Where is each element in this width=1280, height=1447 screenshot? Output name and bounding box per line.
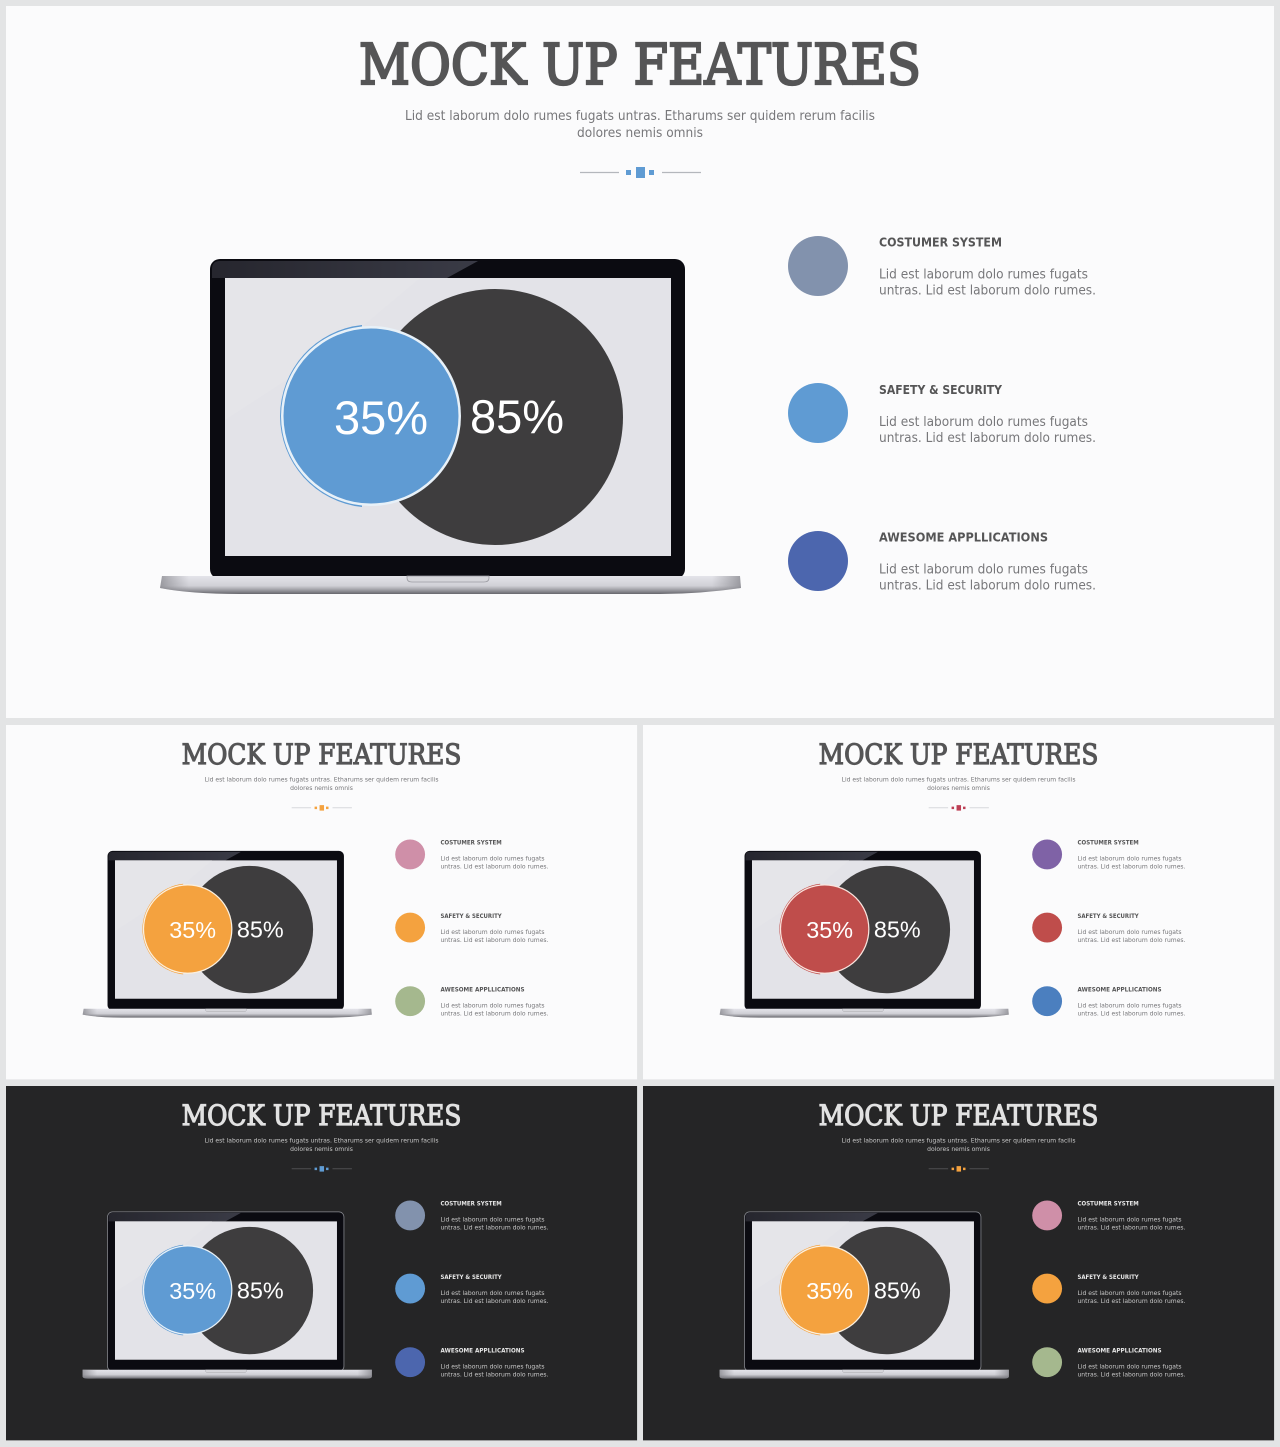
divider ornament [929, 805, 989, 811]
subtitle: Lid est laborum dolo rumes fugats untras. Etharums ser quidem rerum facilis [842, 1137, 1076, 1145]
value: 85%: 85% [874, 1278, 921, 1304]
subtitle [842, 1137, 1076, 1153]
title: MOCK UP FEATURES [819, 1099, 1098, 1132]
title: MOCK UP FEATURES [819, 738, 1098, 771]
feature: safety and security: Lid est laborum dolo rumes fugats [440, 928, 545, 936]
feature: costumer system: COSTUMER SYSTEM [440, 1201, 502, 1208]
feature: safety and security: untras. Lid est laborum dolo rumes. [1077, 936, 1185, 944]
feature: costumer system: COSTUMER SYSTEM [1077, 840, 1139, 847]
feature: awesome applications [395, 986, 548, 1017]
feature: costumer system: untras. Lid est laborum dolo rumes. [1077, 1224, 1185, 1232]
feature: awesome applications: untras. Lid est laborum dolo rumes. [1077, 1009, 1185, 1017]
subtitle: Lid est laborum dolo rumes fugats untras. Etharums ser quidem rerum facilis [405, 109, 875, 124]
feature: awesome applications: AWESOME APPLLICATIONS [440, 987, 525, 994]
feature: safety and security: SAFETY & SECURITY [1077, 1274, 1139, 1281]
value: 85%: 85% [237, 917, 284, 943]
feature: awesome applications: AWESOME APPLLICATIONS [1077, 1348, 1162, 1355]
subtitle: dolores nemis omnis [577, 126, 703, 141]
slide: small light red [643, 725, 1274, 1079]
subtitle: Lid est laborum dolo rumes fugats untras. Etharums ser quidem rerum facilis [205, 776, 439, 784]
subtitle: Lid est laborum dolo rumes fugats untras. Etharums ser quidem rerum facilis [205, 1137, 439, 1145]
title: MOCK UP FEATURES [182, 738, 461, 771]
value: 35%: 35% [169, 917, 216, 943]
feature: costumer system: Lid est laborum dolo rumes fugats [1077, 855, 1182, 863]
feature: safety and security: Lid est laborum dolo rumes fugats [440, 1289, 545, 1297]
feature: safety and security: SAFETY & SECURITY [879, 383, 1002, 397]
feature: safety and security: untras. Lid est laborum dolo rumes. [879, 431, 1096, 446]
feature: costumer system: untras. Lid est laborum dolo rumes. [440, 1224, 548, 1232]
slide: large light blue [6, 6, 1274, 718]
slide: small dark orange [643, 1086, 1274, 1440]
feature: costumer system: untras. Lid est laborum dolo rumes. [440, 863, 548, 871]
feature: costumer system: untras. Lid est laborum dolo rumes. [879, 284, 1096, 298]
laptop with venn chart [83, 851, 372, 1018]
feature: costumer system [395, 1200, 548, 1232]
feature: costumer system: Lid est laborum dolo rumes fugats [879, 268, 1088, 282]
feature: costumer system: untras. Lid est laborum dolo rumes. [1077, 863, 1185, 871]
feature: safety and security: SAFETY & SECURITY [440, 913, 502, 920]
feature: costumer system: Lid est laborum dolo rumes fugats [1077, 1216, 1182, 1224]
subtitle: dolores nemis omnis [290, 1145, 353, 1153]
feature: awesome applications [788, 530, 1096, 594]
subtitle [205, 1137, 439, 1153]
feature: awesome applications: untras. Lid est laborum dolo rumes. [1077, 1370, 1185, 1378]
laptop with venn chart [720, 1212, 1009, 1379]
slide: small light orange [6, 725, 637, 1079]
feature: safety and security [788, 383, 1096, 446]
feature: safety and security: Lid est laborum dolo rumes fugats [1077, 1289, 1182, 1297]
feature: awesome applications: Lid est laborum dolo rumes fugats [879, 562, 1088, 578]
feature: costumer system: Lid est laborum dolo rumes fugats [440, 855, 545, 863]
subtitle [842, 776, 1076, 792]
feature: awesome applications: untras. Lid est laborum dolo rumes. [440, 1009, 548, 1017]
feature: awesome applications: AWESOME APPLLICATIONS [440, 1348, 525, 1355]
feature: awesome applications: Lid est laborum dolo rumes fugats [1077, 1001, 1182, 1009]
feature: safety and security: untras. Lid est laborum dolo rumes. [1077, 1297, 1185, 1305]
feature: safety and security: SAFETY & SECURITY [1077, 913, 1139, 920]
divider ornament [292, 1166, 352, 1172]
divider ornament [929, 1166, 989, 1172]
laptop with venn chart [83, 1212, 372, 1379]
feature: costumer system: Lid est laborum dolo rumes fugats [440, 1216, 545, 1224]
feature: costumer system [788, 236, 1096, 298]
feature: awesome applications: AWESOME APPLLICATIONS [1077, 987, 1162, 994]
feature: costumer system [1032, 1200, 1185, 1232]
feature: safety and security [1032, 913, 1185, 944]
subtitle: Lid est laborum dolo rumes fugats untras. Etharums ser quidem rerum facilis [842, 776, 1076, 784]
value: 85%: 85% [470, 390, 564, 443]
value: 85%: 85% [237, 1278, 284, 1304]
laptop with venn chart [160, 259, 741, 594]
feature: awesome applications: Lid est laborum dolo rumes fugats [1077, 1362, 1182, 1370]
feature: safety and security [1032, 1274, 1185, 1305]
feature: awesome applications [1032, 1347, 1185, 1378]
subtitle: dolores nemis omnis [927, 784, 990, 792]
feature: safety and security: Lid est laborum dolo rumes fugats [879, 415, 1088, 430]
feature: awesome applications: untras. Lid est laborum dolo rumes. [440, 1370, 548, 1378]
title: MOCK UP FEATURES [182, 1099, 461, 1132]
title: MOCK UP FEATURES [359, 33, 921, 98]
feature: costumer system [1032, 839, 1185, 871]
subtitle: dolores nemis omnis [927, 1145, 990, 1153]
feature: safety and security: Lid est laborum dolo rumes fugats [1077, 928, 1182, 936]
feature: awesome applications [395, 1347, 548, 1378]
feature: awesome applications [1032, 986, 1185, 1017]
feature: safety and security: untras. Lid est laborum dolo rumes. [440, 936, 548, 944]
divider ornament [580, 167, 701, 178]
feature: safety and security: untras. Lid est laborum dolo rumes. [440, 1297, 548, 1305]
feature: costumer system [395, 839, 548, 871]
feature: awesome applications: Lid est laborum dolo rumes fugats [440, 1001, 545, 1009]
value: 85%: 85% [874, 917, 921, 943]
value: 35%: 35% [334, 391, 428, 444]
feature: awesome applications: Lid est laborum dolo rumes fugats [440, 1362, 545, 1370]
value: 35%: 35% [806, 917, 853, 943]
feature: safety and security [395, 1274, 548, 1305]
laptop with venn chart [720, 851, 1009, 1018]
feature: awesome applications: AWESOME APPLLICATIONS [879, 530, 1048, 544]
subtitle [405, 109, 875, 141]
feature: safety and security: SAFETY & SECURITY [440, 1274, 502, 1281]
subtitle: dolores nemis omnis [290, 784, 353, 792]
value: 35%: 35% [169, 1278, 216, 1304]
feature: awesome applications: untras. Lid est laborum dolo rumes. [879, 578, 1096, 594]
slide: small dark blue [6, 1086, 637, 1440]
feature: safety and security [395, 913, 548, 944]
feature: costumer system: COSTUMER SYSTEM [1077, 1201, 1139, 1208]
feature: costumer system: COSTUMER SYSTEM [440, 840, 502, 847]
subtitle [205, 776, 439, 792]
feature: costumer system: COSTUMER SYSTEM [879, 236, 1002, 250]
divider ornament [292, 805, 352, 811]
value: 35%: 35% [806, 1278, 853, 1304]
